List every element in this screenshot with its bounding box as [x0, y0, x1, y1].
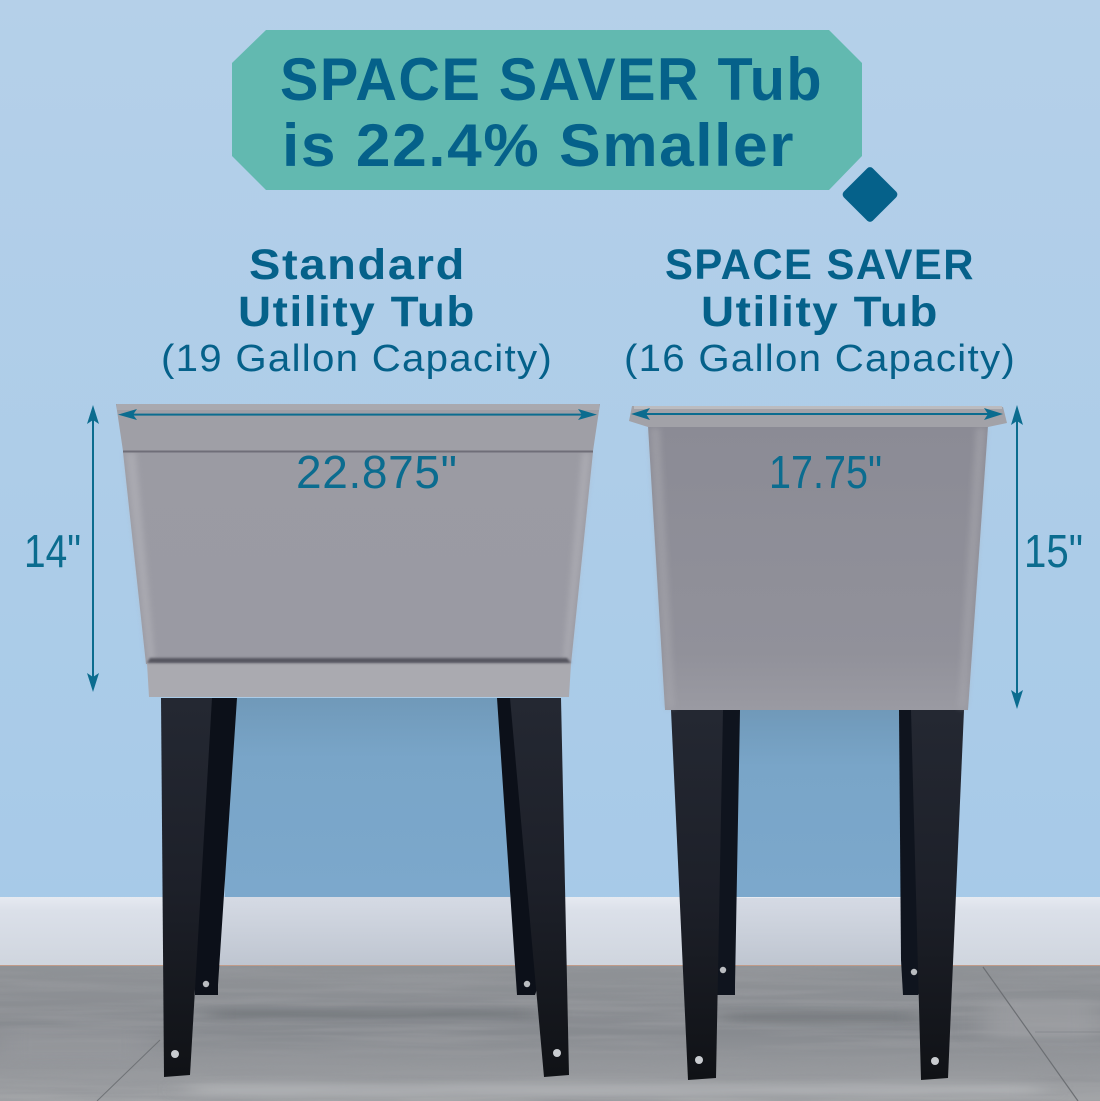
rear left leg: [715, 710, 740, 995]
floor: [0, 966, 1100, 1101]
heading: standard tub: (19 Gallon Capacity): [161, 338, 553, 380]
label: 22.875 inches: 22.875": [296, 446, 457, 498]
banner heading: SPACE SAVER Tub: [280, 46, 823, 113]
standard tub: [116, 404, 600, 697]
arrow: space saver width: [631, 408, 1003, 420]
standard tub legs: [161, 698, 569, 1077]
heading: space saver tub: SPACE SAVER: [665, 241, 975, 289]
arrow: standard height: [87, 405, 99, 692]
tub rim: [116, 404, 600, 451]
baseboard: [0, 897, 1100, 967]
rear left leg: [195, 698, 237, 995]
front right leg: [510, 698, 569, 1077]
tub body: [123, 452, 593, 664]
banner: [232, 30, 862, 190]
heading: space saver tub: (16 Gallon Capacity): [624, 338, 1016, 380]
heading: standard tub: Utility Tub: [238, 288, 476, 336]
space saver tub: [629, 406, 1007, 710]
heading: standard tub: Standard: [249, 241, 466, 289]
label: 14 inches: 14": [24, 525, 81, 577]
tub rim: [629, 406, 1007, 427]
banner heading: is 22.4% Smaller: [282, 112, 795, 179]
banner heading: [280, 46, 823, 179]
rear right leg: [497, 698, 540, 995]
tub body: [648, 426, 988, 710]
heading: standard tub: [161, 241, 553, 380]
arrow: standard width: [118, 409, 597, 420]
heading: space saver tub: [624, 241, 1016, 380]
label: 15 inches: 15": [1024, 525, 1083, 577]
rear right leg: [899, 710, 925, 995]
heading: space saver tub: Utility Tub: [701, 288, 939, 336]
front left leg: [671, 710, 723, 1080]
tub bottom band: [147, 663, 571, 697]
space saver tub legs: [671, 710, 964, 1080]
label: 17.75 inches: 17.75": [769, 446, 882, 498]
icon: diamond: [841, 166, 899, 223]
front right leg: [911, 710, 964, 1080]
arrow: space saver height: [1011, 405, 1023, 709]
front left leg: [161, 698, 212, 1077]
